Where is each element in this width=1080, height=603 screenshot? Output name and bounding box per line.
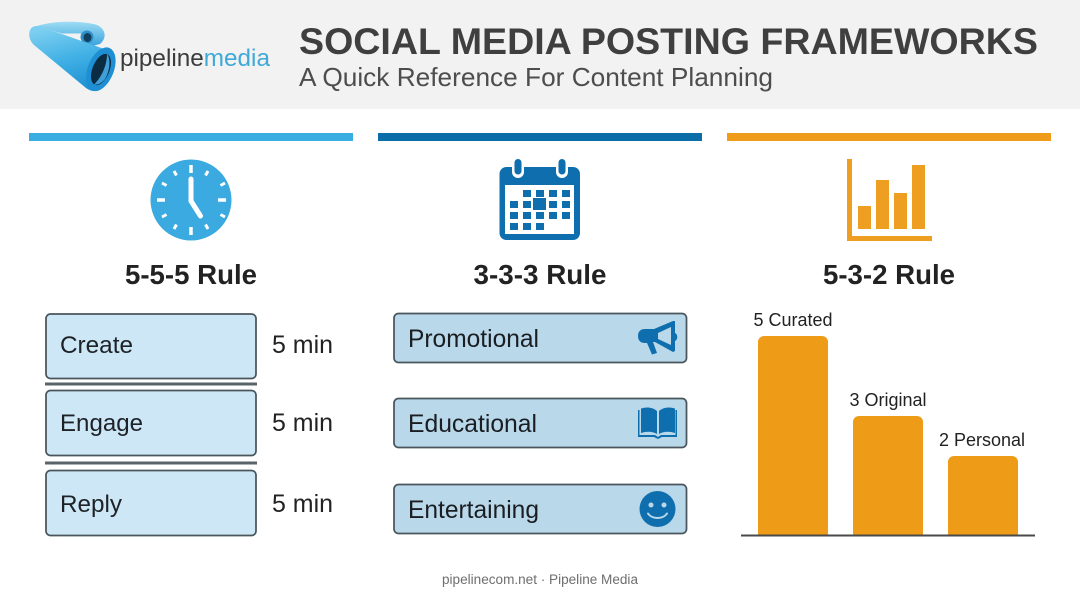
row: engage	[46, 390, 333, 456]
row: entertaining: Entertaining	[408, 496, 539, 524]
heading: 5-5-5 Rule	[125, 259, 257, 290]
row: promotional: Promotional	[408, 325, 539, 353]
row: educational: Educational	[408, 410, 537, 438]
row: engage: 5 min	[272, 409, 333, 437]
row: reply	[46, 470, 333, 536]
row: create: 5 min	[272, 331, 333, 359]
heading: 5-3-2 Rule	[823, 259, 955, 290]
panel: 3-3-3 rule	[378, 133, 702, 534]
row: educational	[394, 398, 686, 448]
title: SOCIAL MEDIA POSTING FRAMEWORKS	[299, 20, 1038, 62]
icon: clock	[150, 160, 232, 240]
header band	[0, 0, 1080, 109]
row: create	[46, 314, 333, 378]
row: reply: Reply	[60, 491, 123, 518]
icon: bar chart	[847, 159, 932, 241]
icon: smiley	[640, 491, 676, 527]
icon: open book	[638, 407, 677, 439]
icon: calendar	[500, 162, 580, 240]
icon: megaphone	[638, 321, 677, 354]
chart: 5-3-2 bars	[741, 310, 1035, 536]
chart: 5-3-2 bars: 2 Personal	[939, 430, 1025, 450]
panel: 5-5-5 rule	[29, 133, 353, 536]
row: reply: 5 min	[272, 490, 333, 518]
subtitle: A Quick Reference For Content Planning	[299, 62, 773, 92]
chart: 5-3-2 bars: 3 Original	[850, 390, 926, 410]
heading: 3-3-3 Rule	[474, 259, 606, 290]
row: entertaining	[394, 484, 686, 534]
row: promotional	[394, 314, 686, 362]
row: create: Create	[60, 332, 133, 359]
footer: pipelinecom.net · Pipeline Media	[442, 572, 638, 587]
row: engage: Engage	[60, 410, 143, 437]
chart: 5-3-2 bars: 5 Curated	[754, 310, 832, 330]
logo wordmark: pipelinemedia	[120, 45, 270, 72]
panel: 5-3-2 rule	[727, 133, 1051, 536]
icon: pipeline logo	[29, 22, 121, 95]
